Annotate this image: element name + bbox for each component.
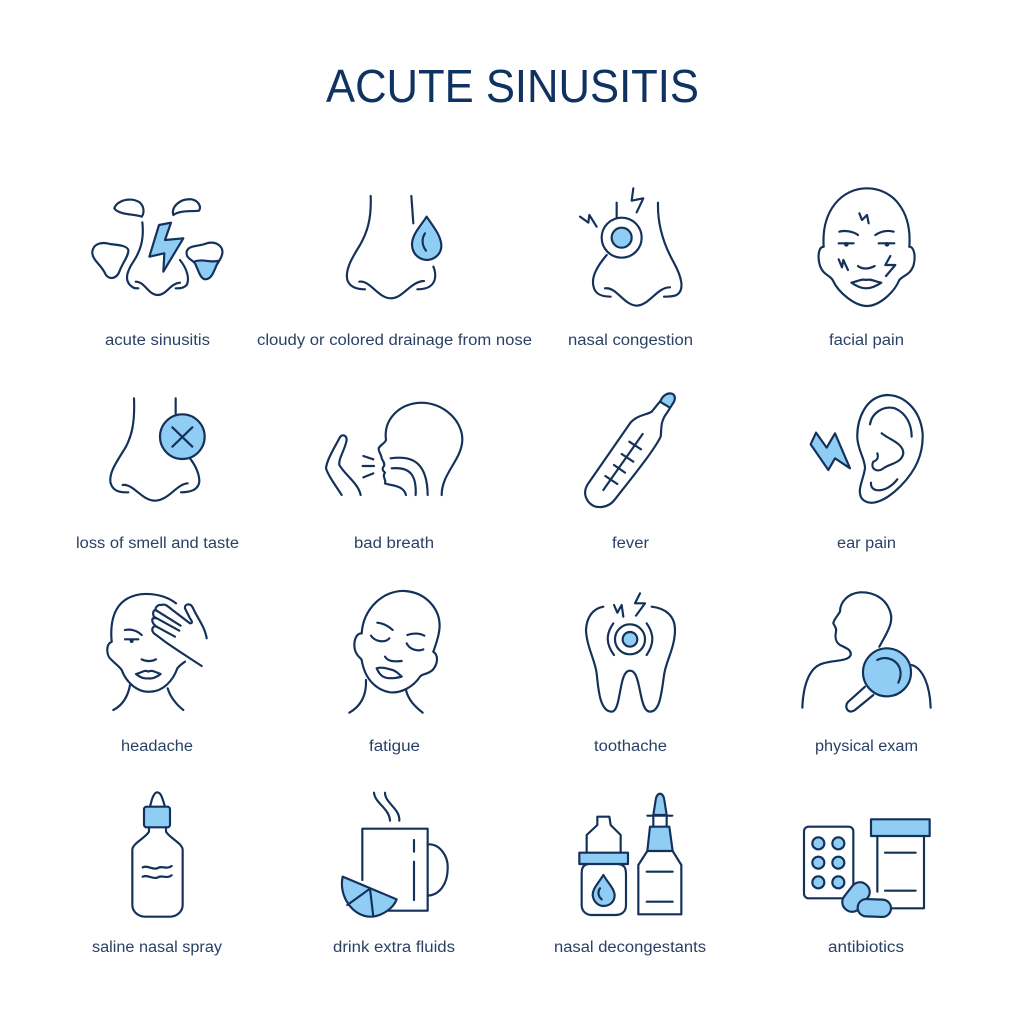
panel: saline nasal spray — [92, 792, 222, 956]
panel: bad breath — [326, 403, 462, 552]
label: facial pain — [829, 332, 904, 349]
panel: physical exam — [802, 592, 931, 755]
panel: drink extra fluids — [333, 793, 455, 956]
label: fatigue — [369, 738, 420, 755]
icon: head profile breathing on hand — [326, 403, 462, 495]
panel: headache — [107, 594, 207, 755]
panel: antibiotics — [804, 819, 930, 956]
icon: sinuses with lightning bolt — [92, 199, 222, 295]
icon: blister pack, pills and jar — [804, 819, 930, 917]
icon: nose with drop — [347, 196, 441, 298]
icon: mug with lemon — [342, 793, 448, 917]
icon: ear with bolt — [811, 395, 923, 503]
label: bad breath — [354, 535, 434, 552]
icon: face with pain bolts — [819, 188, 915, 306]
icon: tooth with pain rings — [586, 593, 675, 712]
icon: nose with crossed circle — [110, 398, 205, 501]
label: ear pain — [837, 535, 896, 552]
icon: tired face — [349, 591, 440, 713]
label: antibiotics — [828, 939, 904, 956]
panel: loss of smell and taste — [76, 398, 239, 552]
panel: facial pain — [819, 188, 915, 349]
panel: acute sinusitis — [92, 199, 222, 349]
label: cloudy or colored drainage from nose — [257, 332, 532, 349]
icon: person with magnifier — [802, 592, 931, 712]
label: nasal congestion — [568, 332, 693, 349]
panel: nasal decongestants — [554, 794, 706, 956]
icon: spray bottle — [132, 792, 183, 917]
label: headache — [121, 738, 193, 755]
icon: drops and spray bottles — [579, 794, 681, 915]
panel: fatigue — [349, 591, 440, 755]
panel: cloudy or colored drainage — [257, 196, 532, 349]
panel: toothache — [586, 593, 675, 755]
icon: thermometer — [585, 393, 675, 507]
icon: face with hand on forehead — [107, 594, 207, 710]
label: drink extra fluids — [333, 939, 455, 956]
label: loss of smell and taste — [76, 535, 239, 552]
label: toothache — [594, 738, 667, 755]
label: fever — [612, 535, 649, 552]
label: acute sinusitis — [105, 332, 210, 349]
panel: ear pain — [811, 395, 923, 552]
label: saline nasal spray — [92, 939, 222, 956]
title: ACUTE SINUSITIS — [326, 60, 699, 112]
label: nasal decongestants — [554, 939, 706, 956]
icon: nose with blocked nostril — [580, 188, 681, 306]
panel: fever — [585, 393, 675, 552]
panel: nasal congestion — [568, 188, 693, 349]
label: physical exam — [815, 738, 918, 755]
